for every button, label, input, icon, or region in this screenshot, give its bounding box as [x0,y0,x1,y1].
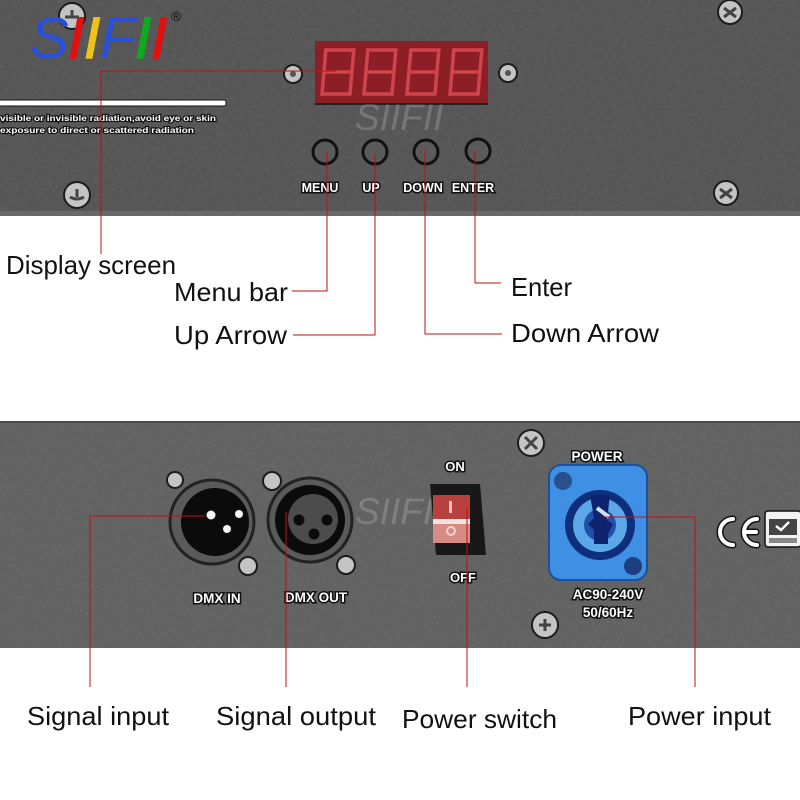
label: power input: Power input [628,701,772,731]
LED display [315,41,488,105]
DMX OUT connector [263,472,355,574]
logo: SIIFII: I [135,6,151,71]
button labels [302,181,494,195]
power connector [549,465,647,580]
screws on bottom panel [518,430,558,638]
label: enter: Enter [511,272,572,302]
leader line: power switch [466,508,468,687]
switch labels: ON [445,459,465,474]
label: display screen: Display screen [6,250,176,280]
leader line: enter [475,150,501,283]
panel: bottom rear panel [0,421,800,648]
certification mark [765,511,800,547]
leader line: up arrow [293,154,375,335]
button labels: DOWN [403,181,443,195]
leader line: menu bar [292,152,327,291]
button labels: UP [362,181,380,195]
label: menu bar: Menu bar [174,277,288,307]
DMX IN connector [167,472,257,575]
power labels [571,449,643,620]
leader line: power input [603,517,695,687]
power labels: POWER [571,449,623,464]
CE mark [720,519,757,545]
button labels: ENTER [452,181,494,195]
watermark: SIIFII [355,491,443,532]
digit 3 [407,50,439,94]
panel: top control panel [0,0,800,216]
watermark: SIIFII [355,97,443,138]
connector labels: DMX IN [193,591,241,606]
digit 2 [364,50,396,94]
leader line: signal output [285,512,287,687]
button labels: MENU [302,181,338,195]
warning label text: exposure to direct or scattered radiation [0,125,194,135]
registered mark: ® [171,8,182,24]
logo: SIIFII: F [100,6,139,71]
power switch [430,484,486,555]
logo: SIIFII: I [68,6,84,71]
warning label text: visible or invisible radiation,avoid eye or skin [0,113,216,123]
buttons [313,139,490,164]
switch labels [445,459,476,585]
connector labels: DMX OUT [285,590,348,605]
warning label text [0,100,226,135]
leader line: down arrow [425,150,502,334]
digit 4 [450,50,482,94]
label: power switch: Power switch [402,704,557,734]
power labels: AC90-240V [573,587,643,602]
label: down arrow: Down Arrow [511,318,659,348]
leader line: signal input [90,516,205,687]
leader line: display screen [101,71,336,254]
label: signal output: Signal output [216,701,377,731]
power labels: 50/60Hz [583,605,633,620]
connector labels [193,590,348,606]
screws on top panel [59,0,742,208]
switch labels: OFF [450,570,476,585]
label: up arrow: Up Arrow [174,320,287,350]
digit 1 [322,50,354,94]
logo: SIIFII: S [30,6,69,71]
logo: SIIFII: I [151,6,167,71]
logo: SIIFII: I [84,6,100,71]
label: signal input: Signal input [27,701,170,731]
